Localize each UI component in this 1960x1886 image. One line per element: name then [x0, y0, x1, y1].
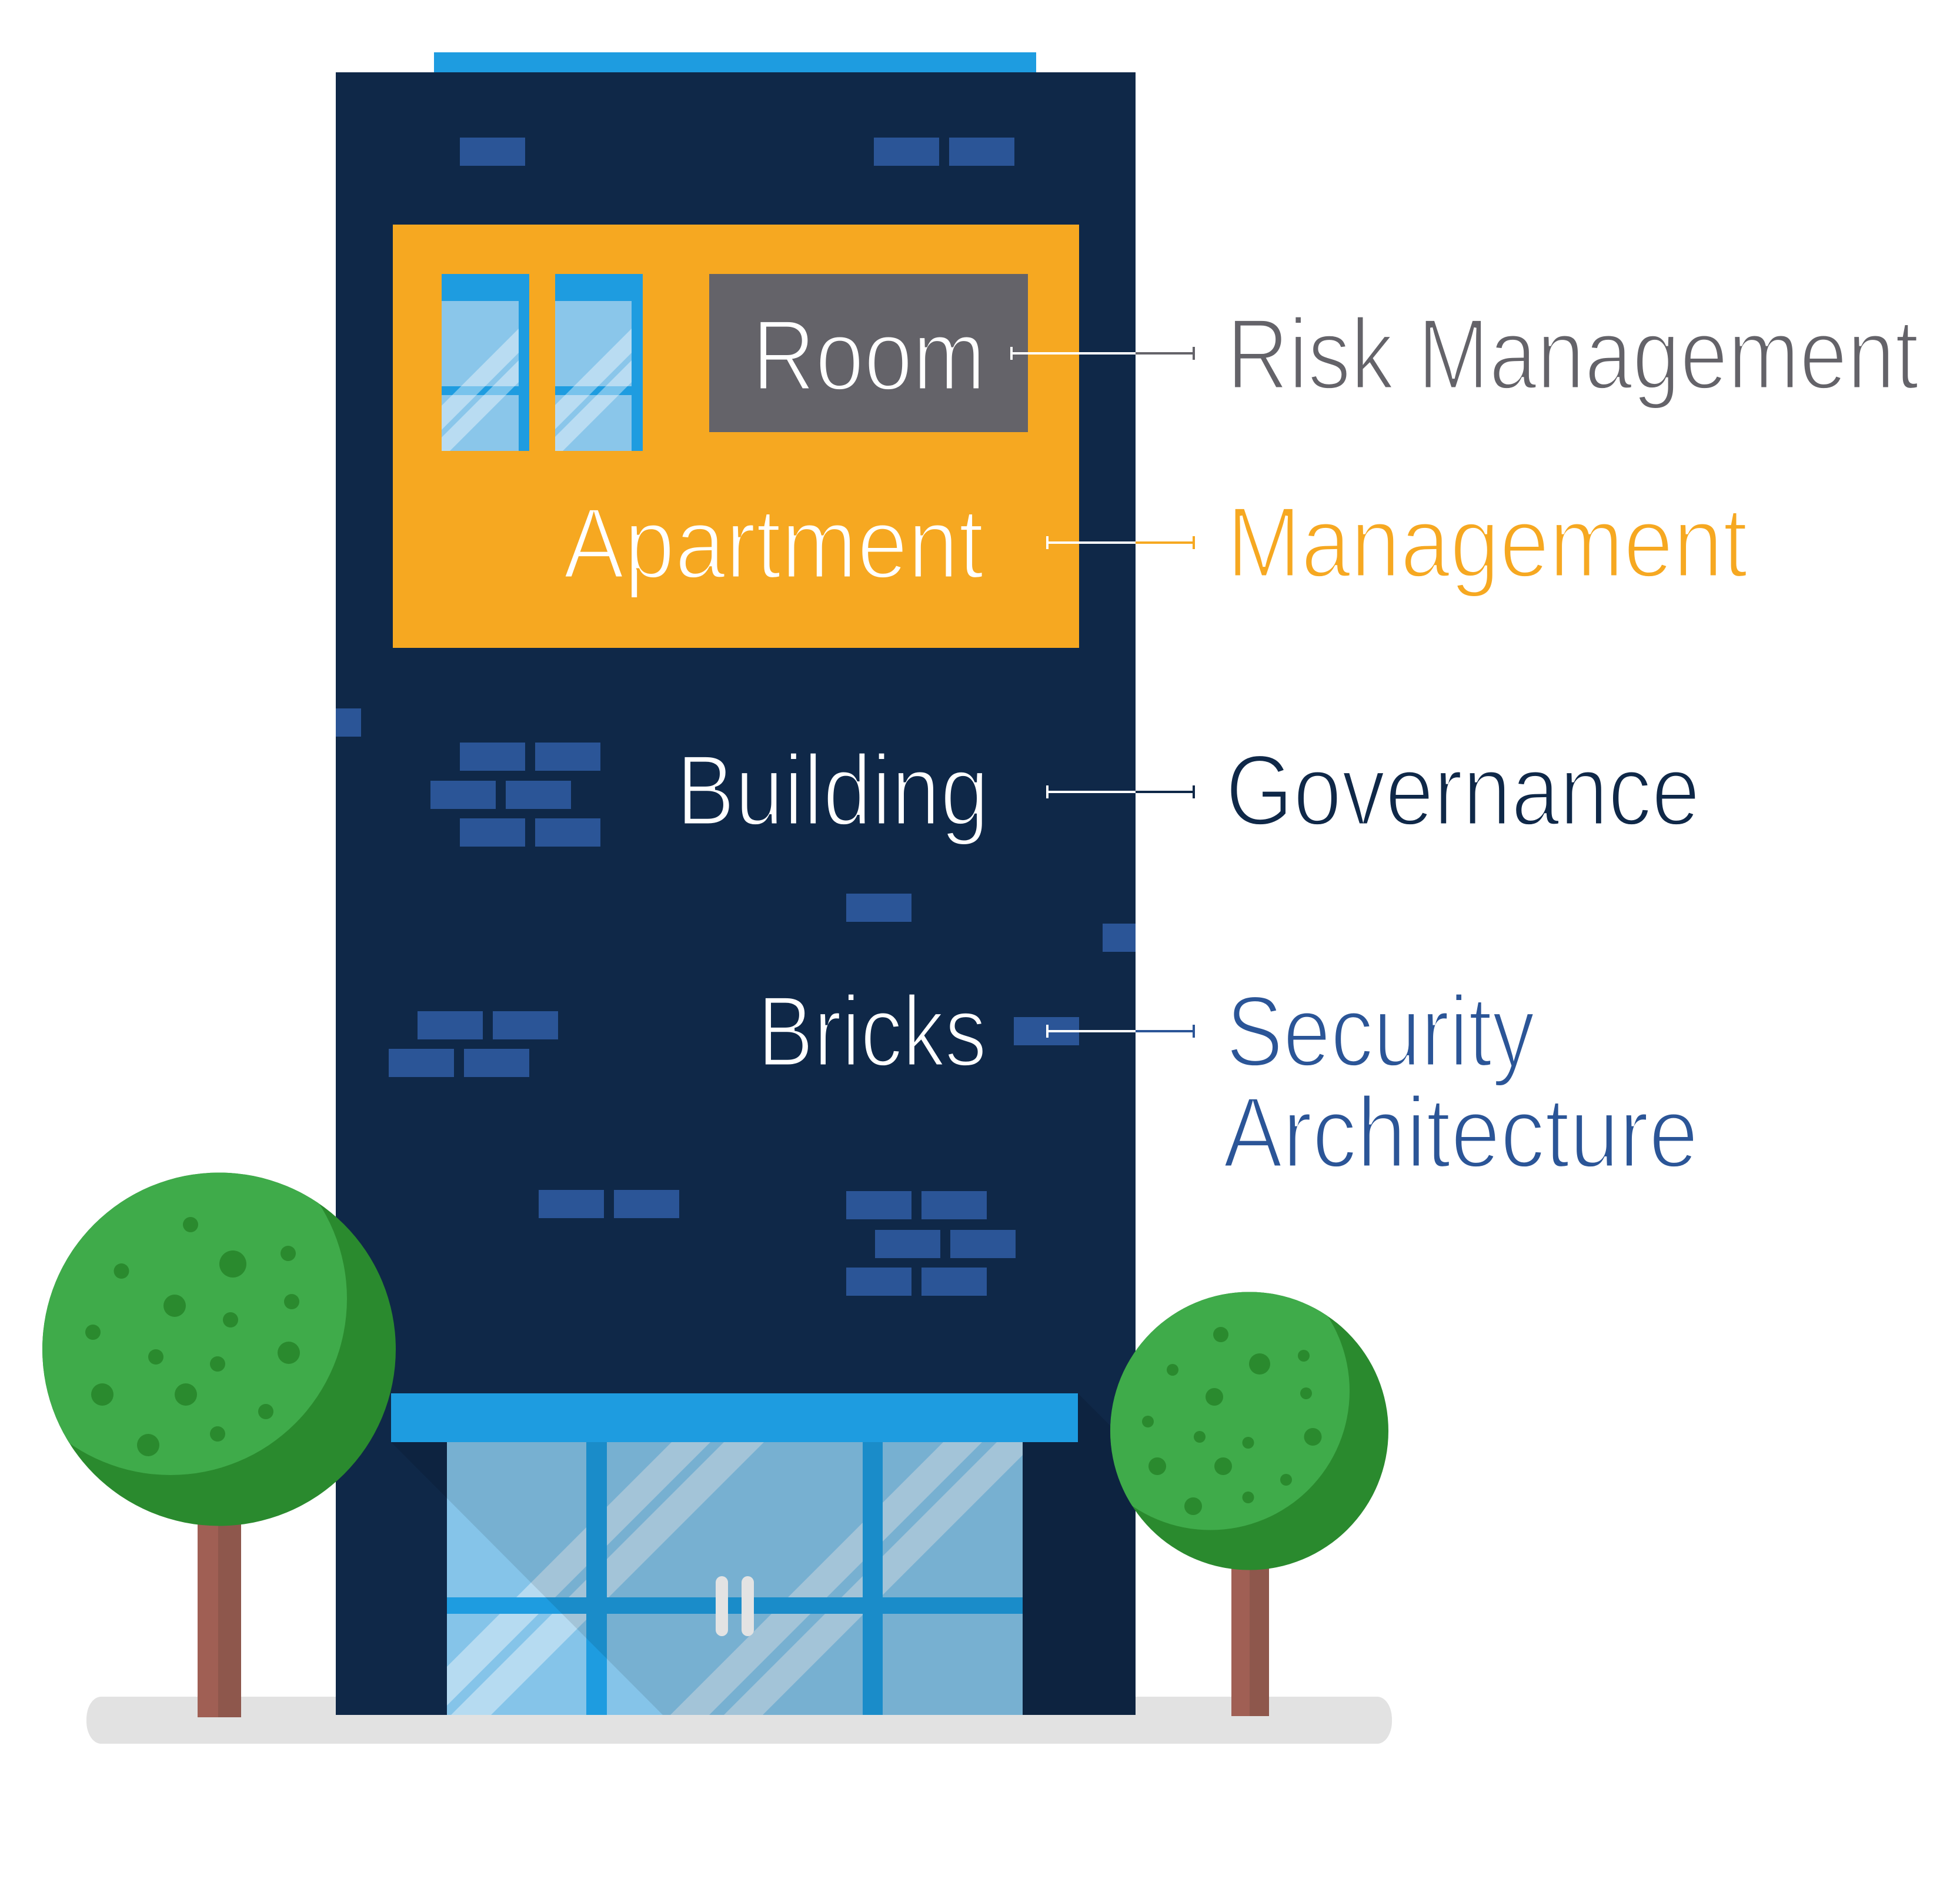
awning	[391, 1393, 1078, 1442]
building body	[336, 72, 1136, 1715]
storefront: glass doors	[399, 1442, 1036, 1715]
heading: Management: Management	[1227, 486, 1748, 598]
tree: left	[42, 1172, 396, 1717]
apartment window right	[555, 274, 643, 451]
heading: Security Architecture: Security	[1226, 975, 1535, 1088]
leader line: apartment to management	[1047, 536, 1194, 549]
label: Room: Room	[752, 299, 986, 412]
heading: Governance: Governance	[1226, 734, 1700, 847]
heading: Security Architecture	[1223, 975, 1698, 1189]
label: Apartment: Apartment	[563, 487, 984, 600]
tree: right	[1110, 1292, 1388, 1716]
leader line: bricks to security architecture	[1047, 1025, 1194, 1038]
awning shadow	[391, 1393, 1136, 1715]
panel: apartment	[393, 225, 1079, 648]
roof bar	[434, 52, 1036, 73]
heading: Security Architecture: Architecture	[1223, 1076, 1698, 1189]
apartment window left	[442, 274, 529, 451]
bricks on building wall	[336, 138, 1136, 1296]
panel: room	[709, 274, 1028, 432]
ground strip	[86, 1697, 1392, 1744]
label: Bricks: Bricks	[757, 975, 987, 1088]
leader line: building to governance	[1047, 785, 1194, 798]
label: Building: Building	[676, 734, 989, 847]
leader line: room to risk management	[1011, 347, 1194, 360]
door handles	[716, 1576, 754, 1636]
